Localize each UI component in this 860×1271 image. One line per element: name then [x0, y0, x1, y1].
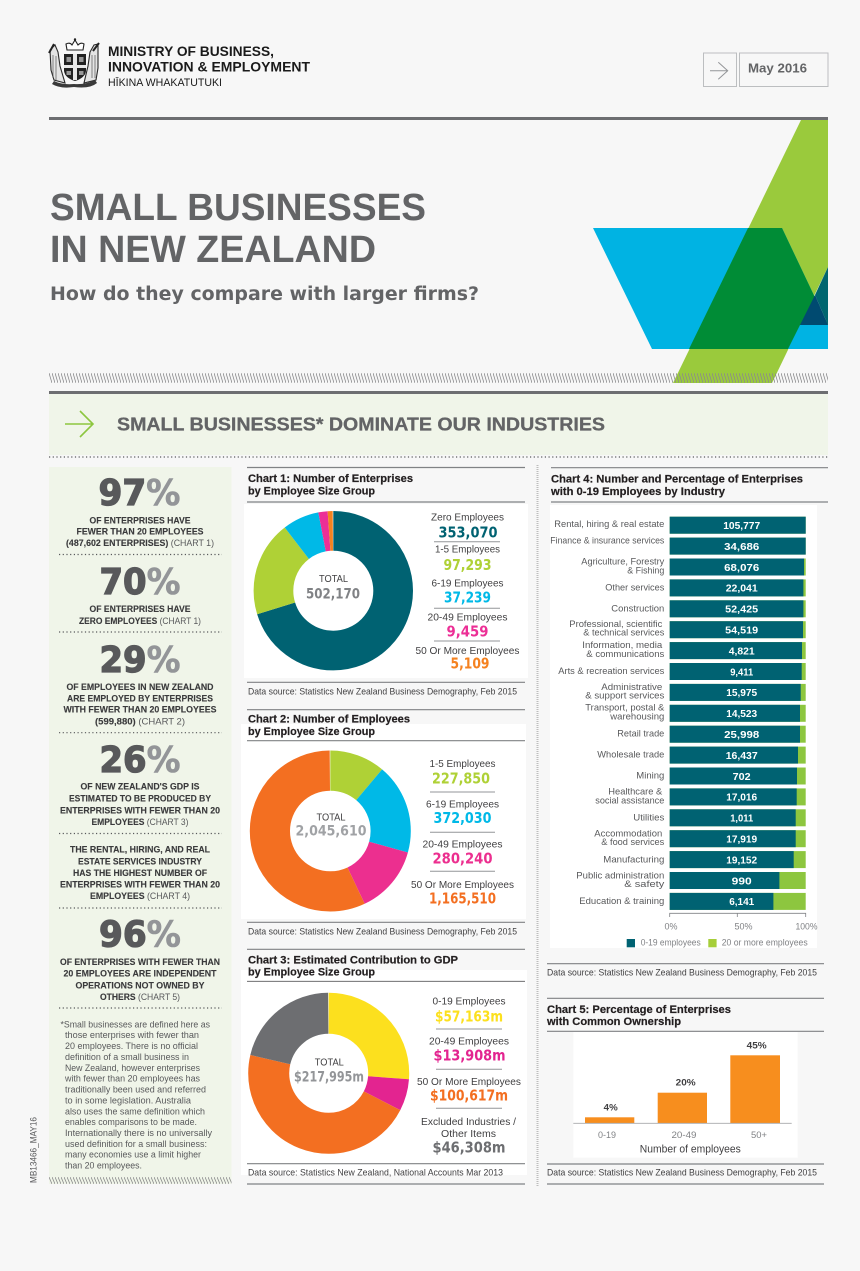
legend: chart 3: Other Items: [441, 1128, 496, 1140]
industry labels: Agriculture, Forestry: [581, 556, 665, 567]
legend: chart 1: 6-19 Employees: [432, 578, 504, 590]
stat: 29%: ARE EMPLOYED BY ENTERPRISES: [67, 693, 213, 703]
title: SMALL BUSINESSES: [50, 187, 426, 229]
stat: rental hiring and real estate: [60, 845, 220, 901]
data source: chart 3: Data source: Statistics New Zealand, National Accounts Mar 2013: [248, 1168, 503, 1179]
footnote: than 20 employees.: [65, 1161, 142, 1171]
stat: 96%: OTHERS (CHART 5): [100, 992, 180, 1002]
x axis: 50%: [734, 921, 753, 932]
heading: chart 4: [550, 473, 803, 498]
legend: chart 2: 50 Or More Employees: [411, 879, 514, 891]
industry labels: & technical services: [583, 628, 665, 639]
bar values: 54,519: [725, 624, 758, 636]
bar values: 15,975: [726, 687, 757, 699]
industry labels: Finance & insurance services: [550, 535, 665, 546]
stat: 26%: ENTERPRISES WITH FEWER THAN 20: [60, 805, 220, 815]
green bars: [670, 517, 806, 910]
stat: 97%: [66, 473, 214, 548]
footnote: New Zealand, however enterprises: [65, 1063, 200, 1073]
industry labels: [550, 519, 665, 907]
footnote: many economies use a limit higher: [65, 1150, 201, 1160]
stat: 29%: WITH FEWER THAN 20 EMPLOYEES: [64, 705, 216, 715]
donut total: [296, 811, 367, 840]
panel: chart 3: [241, 949, 527, 1184]
donut total: TOTAL: [316, 811, 346, 823]
organisation name: MINISTRY OF BUSINESS,: [108, 43, 274, 59]
bar values: 990: [732, 875, 752, 887]
legend: chart 2: 1-5 Employees: [430, 758, 496, 770]
legend: chart 2: 6-19 Employees: [426, 798, 499, 810]
heading: chart 1: by Employee Size Group: [248, 486, 375, 498]
industry labels: Arts & recreation services: [558, 666, 665, 677]
heading: chart 5: with Common Ownership: [546, 1016, 681, 1028]
industry labels: Transport, postal &: [585, 703, 665, 714]
stat: 96%: 96%: [99, 915, 181, 956]
industry labels: Retail trade: [617, 729, 664, 740]
heading: chart 5: [546, 1004, 731, 1028]
legend: chart 3: $13,908m: [434, 1047, 506, 1064]
panel: key statistics: [49, 467, 232, 1184]
legend: chart 2: 20-49 Employees: [422, 839, 502, 851]
bar values: 4,821: [729, 645, 755, 657]
industry labels: Rental, hiring & real estate: [554, 519, 664, 530]
stat: rental hiring and real estate: HAS THE HIGHEST NUMBER OF: [73, 868, 207, 878]
stat: 26%: 26%: [100, 740, 180, 781]
legend: chart 1: 97,293: [444, 557, 492, 574]
bar chart: common ownership: 45%: [747, 1041, 767, 1052]
industry labels: & communications: [586, 649, 665, 660]
legend: chart 1: 5,109: [450, 655, 490, 672]
bar chart: common ownership: 50+: [751, 1130, 767, 1141]
footnote: those enterprises with fewer than: [65, 1030, 199, 1040]
footnote: to in some legislation. Australia: [65, 1095, 191, 1105]
legend: chart 3: $57,163m: [435, 1008, 503, 1025]
industry labels: & Fishing: [627, 565, 664, 576]
section banner: [49, 394, 828, 455]
heading: chart 3: [248, 954, 458, 978]
panel: chart 4: [547, 468, 828, 979]
stat: 29%: OF EMPLOYEES IN NEW ZEALAND: [66, 682, 214, 692]
donut total: TOTAL: [315, 1057, 344, 1069]
organisation name: HĪKINA WHAKATUTUKI: [108, 77, 222, 89]
legend: chart 3: 0-19 Employees: [432, 995, 506, 1007]
bar chart: common ownership: 0-19: [598, 1130, 616, 1141]
footnote: traditionally been used and referred: [65, 1084, 206, 1094]
stat: 70%: ZERO EMPLOYEES (CHART 1): [79, 616, 201, 626]
teal bars: [670, 517, 806, 910]
stat: 29%: [64, 640, 216, 726]
bar chart: common ownership: 20%: [676, 1078, 696, 1089]
stat: 29%: (599,880) (CHART 2): [95, 716, 185, 726]
x axis: [664, 913, 818, 932]
industry labels: Wholesale trade: [597, 750, 664, 761]
stat: 96%: [60, 915, 220, 1002]
footnote: used definition for a small business:: [65, 1139, 207, 1149]
stat: 97%: 97%: [98, 473, 180, 514]
heading: chart 1: Chart 1: Number of Enterprises: [248, 473, 413, 485]
industry labels: Mining: [636, 771, 664, 782]
industry labels: Other services: [605, 582, 665, 593]
stat: 70%: 70%: [100, 562, 180, 603]
stat: 26%: OF NEW ZEALAND'S GDP IS: [80, 781, 200, 791]
industry labels: & support services: [585, 691, 665, 702]
industry labels: Administrative: [601, 682, 662, 693]
stat: 29%: 29%: [100, 640, 180, 681]
donut total: $217,995m: [294, 1069, 364, 1085]
stat: 96%: OF ENTERPRISES WITH FEWER THAN: [60, 957, 220, 967]
heading: chart 4: with 0-19 Employees by Industry: [550, 486, 726, 498]
stat: 97%: (487,602 ENTERPRISES) (CHART 1): [66, 538, 214, 548]
bar values: 14,523: [726, 708, 757, 720]
legend: chart 3: 20-49 Employees: [429, 1035, 509, 1047]
heading: chart 1: [248, 473, 413, 498]
heading: chart 4: Chart 4: Number and Percentage of Enterprises: [551, 473, 803, 485]
stat: 97%: FEWER THAN 20 EMPLOYEES: [76, 527, 204, 537]
footnote: enables comparisons to be made.: [65, 1117, 197, 1127]
stat: rental hiring and real estate: ESTATE SERVICES INDUSTRY: [78, 856, 202, 866]
stat: 70%: [79, 562, 201, 626]
subtitle: How do they compare with larger firms?: [50, 284, 479, 305]
legend: chart 4: 20 or more employees: [722, 938, 808, 949]
industry labels: Information, media: [582, 640, 663, 651]
legend: chart 4: [627, 938, 808, 949]
footnote: with fewer than 20 employees has: [64, 1074, 200, 1084]
bar values: 105,777: [723, 520, 760, 532]
footnote: definition of a small business in: [65, 1052, 189, 1062]
bar values: 16,437: [726, 750, 758, 762]
industry labels: & safety: [624, 879, 665, 890]
legend: chart 1: 9,459: [446, 624, 488, 641]
legend: chart 2: 227,850: [432, 771, 490, 788]
panel: chart 5: [546, 998, 824, 1184]
donut total: 2,045,610: [296, 824, 367, 840]
industry labels: social assistance: [595, 795, 664, 806]
donut total: TOTAL: [319, 573, 348, 585]
organisation name: [108, 43, 310, 89]
stat: 26%: [60, 740, 220, 827]
donut total: 502,170: [306, 587, 360, 603]
bar chart: common ownership: Number of employees: [640, 1143, 741, 1155]
industry labels: Public administration: [576, 870, 664, 881]
heading: chart 3: Chart 3: Estimated Contribution to GDP: [248, 954, 458, 966]
footnote: also uses the same definition which: [65, 1106, 205, 1116]
footnote: [60, 1019, 213, 1171]
data source: chart 5: Data source: Statistics New Zealand Business Demography, Feb 2015: [547, 1168, 817, 1179]
industry labels: Utilities: [633, 812, 665, 823]
footnote: 20 employees. There is no official: [65, 1041, 198, 1051]
stat: 97%: OF ENTERPRISES HAVE: [90, 515, 190, 525]
bar values: 702: [733, 771, 751, 783]
heading: chart 5: Chart 5: Percentage of Enterprises: [547, 1004, 731, 1016]
legend: chart 1: 353,070: [438, 524, 498, 541]
decorative geometric shapes: [593, 120, 828, 383]
title: [50, 187, 426, 271]
panel: chart 2: [241, 710, 526, 937]
industry labels: & food services: [601, 837, 665, 848]
legend: chart 1: 50 Or More Employees: [416, 645, 520, 657]
legend: chart 3: [417, 995, 521, 1157]
legend: chart 4: 0-19 employees: [641, 938, 701, 949]
bar values: 9,411: [730, 666, 753, 678]
stat: rental hiring and real estate: ENTERPRISES WITH FEWER THAN 20: [60, 879, 220, 889]
donut chart: employees: [270, 771, 391, 891]
section banner: SMALL BUSINESSES* DOMINATE OUR INDUSTRIES: [117, 414, 605, 434]
legend: chart 1: 37,239: [444, 589, 491, 606]
bar chart: common ownership: [573, 1041, 792, 1155]
stat: rental hiring and real estate: THE RENTAL, HIRING, AND REAL: [70, 845, 210, 855]
legend: chart 1: [416, 512, 520, 672]
legend: chart 2: [411, 758, 514, 907]
industry labels: Education & training: [579, 896, 664, 907]
footnote: *Small businesses are defined here as: [60, 1019, 210, 1029]
bar chart: common ownership: 4%: [604, 1103, 618, 1114]
bar values: 68,076: [724, 562, 759, 574]
heading: chart 2: by Employee Size Group: [248, 726, 375, 738]
title: IN NEW ZEALAND: [50, 229, 376, 271]
legend: chart 2: 372,030: [434, 810, 492, 827]
bar values: 25,998: [724, 729, 759, 741]
legend: chart 3: 50 Or More Employees: [417, 1076, 521, 1088]
donut total: [306, 573, 360, 603]
stat: 70%: OF ENTERPRISES HAVE: [90, 604, 190, 614]
icon: coat of arms crest: [49, 38, 99, 88]
legend: chart 1: 1-5 Employees: [435, 543, 500, 555]
donut total: [294, 1057, 364, 1085]
data source: chart 1: Data source: Statistics New Zealand Business Demography, Feb 2015: [248, 686, 517, 697]
date box with arrow: [704, 53, 828, 86]
bar values: 6,141: [729, 896, 754, 908]
bar values: 34,686: [724, 541, 759, 553]
data source: chart 2: Data source: Statistics New Zealand Business Demography, Feb 2015: [248, 926, 517, 937]
organisation name: INNOVATION & EMPLOYMENT: [108, 58, 310, 74]
industry labels: Construction: [611, 604, 664, 615]
date box with arrow: May 2016: [748, 61, 807, 76]
stat: rental hiring and real estate: EMPLOYEES (CHART 4): [90, 891, 190, 901]
industry labels: Accommodation: [594, 828, 662, 839]
bar values: 19,152: [726, 854, 757, 866]
legend: chart 3: $100,617m: [430, 1088, 508, 1105]
x axis: 100%: [796, 921, 818, 932]
panel: chart 1: [244, 468, 528, 697]
legend: chart 3: Excluded Industries /: [421, 1116, 516, 1128]
bar values: 52,425: [725, 604, 758, 616]
stat: 96%: 20 EMPLOYEES ARE INDEPENDENT: [64, 969, 217, 979]
legend: chart 2: 1,165,510: [429, 890, 496, 907]
legend: chart 2: 280,240: [432, 851, 492, 868]
bar values: [723, 520, 760, 908]
industry labels: Healthcare &: [608, 787, 663, 798]
industry labels: Manufacturing: [603, 854, 664, 865]
heading: chart 2: [248, 714, 410, 738]
donut chart: enterprises: [273, 531, 393, 651]
stat: 26%: EMPLOYEES (CHART 3): [92, 817, 188, 827]
bar values: 17,919: [726, 834, 757, 846]
heading: chart 2: Chart 2: Number of Employees: [248, 714, 410, 726]
x axis: 0%: [664, 921, 678, 932]
industry labels: Professional, scientific: [569, 619, 663, 630]
donut chart: GDP: [269, 1013, 389, 1133]
stacked bar chart: industries: [550, 517, 818, 949]
legend: chart 3: $46,308m: [432, 1140, 506, 1157]
stat: 26%: ESTIMATED TO BE PRODUCED BY: [69, 794, 211, 804]
data source: chart 4: Data source: Statistics New Zealand Business Demography, Feb 2015: [547, 968, 817, 979]
stat: 96%: OPERATIONS NOT OWNED BY: [76, 980, 204, 990]
industry labels: warehousing: [609, 711, 664, 722]
document code: MB13466_MAY16: [28, 1117, 38, 1183]
bar values: 22,041: [726, 583, 758, 595]
bar values: 17,016: [726, 792, 757, 804]
legend: chart 1: Zero Employees: [431, 512, 504, 524]
bar chart: common ownership: 20-49: [672, 1130, 696, 1141]
heading: chart 3: by Employee Size Group: [248, 966, 375, 978]
legend: chart 1: 20-49 Employees: [428, 612, 508, 624]
footnote: Internationally there is no universally: [65, 1128, 213, 1138]
bar values: 1,011: [730, 813, 753, 825]
